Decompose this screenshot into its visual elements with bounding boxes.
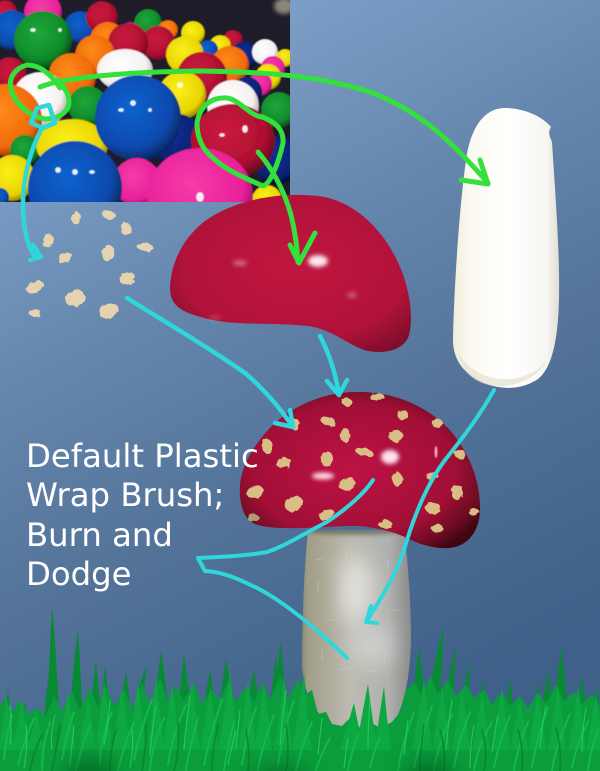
grass dark shadows bbox=[64, 759, 456, 771]
mushroom cap with spots bbox=[240, 392, 480, 548]
grass tall dark blades bbox=[2, 606, 600, 745]
white gumball stem part bbox=[453, 108, 559, 388]
crumbs: cream flakes bbox=[24, 208, 155, 322]
gumball highlights bbox=[30, 28, 248, 202]
text label: Wrap Brush; bbox=[26, 476, 224, 514]
stem scratches bbox=[315, 550, 402, 672]
photo: gumballs bbox=[0, 0, 290, 202]
text label: Burn and bbox=[26, 516, 173, 554]
grass bbox=[0, 606, 600, 771]
cyan arrow: white part to stem bbox=[366, 390, 494, 623]
green arrow: white gumball to white stem bbox=[10, 65, 488, 184]
grass dark strokes bbox=[30, 722, 560, 771]
red jelly bean part bbox=[170, 195, 411, 352]
cap spots bbox=[245, 392, 479, 532]
cyan arrow: crumbs to cap bbox=[127, 298, 293, 427]
grass mid blades bbox=[0, 672, 600, 750]
cyan arrow: white gumball to crumbs bbox=[23, 105, 55, 260]
grass light streaks bbox=[10, 690, 586, 768]
text label: Dodge bbox=[26, 555, 132, 593]
green arrow: red gumball to cap part bbox=[197, 98, 315, 263]
cyan arrow: red part to cap bbox=[320, 336, 347, 395]
mushroom stem bbox=[302, 530, 411, 728]
text label: Default Plastic bbox=[26, 437, 259, 475]
grass solid base bbox=[0, 676, 600, 771]
grass fine blades bbox=[4, 700, 598, 770]
cyan bracket: brush and dodge notes bbox=[198, 480, 373, 658]
